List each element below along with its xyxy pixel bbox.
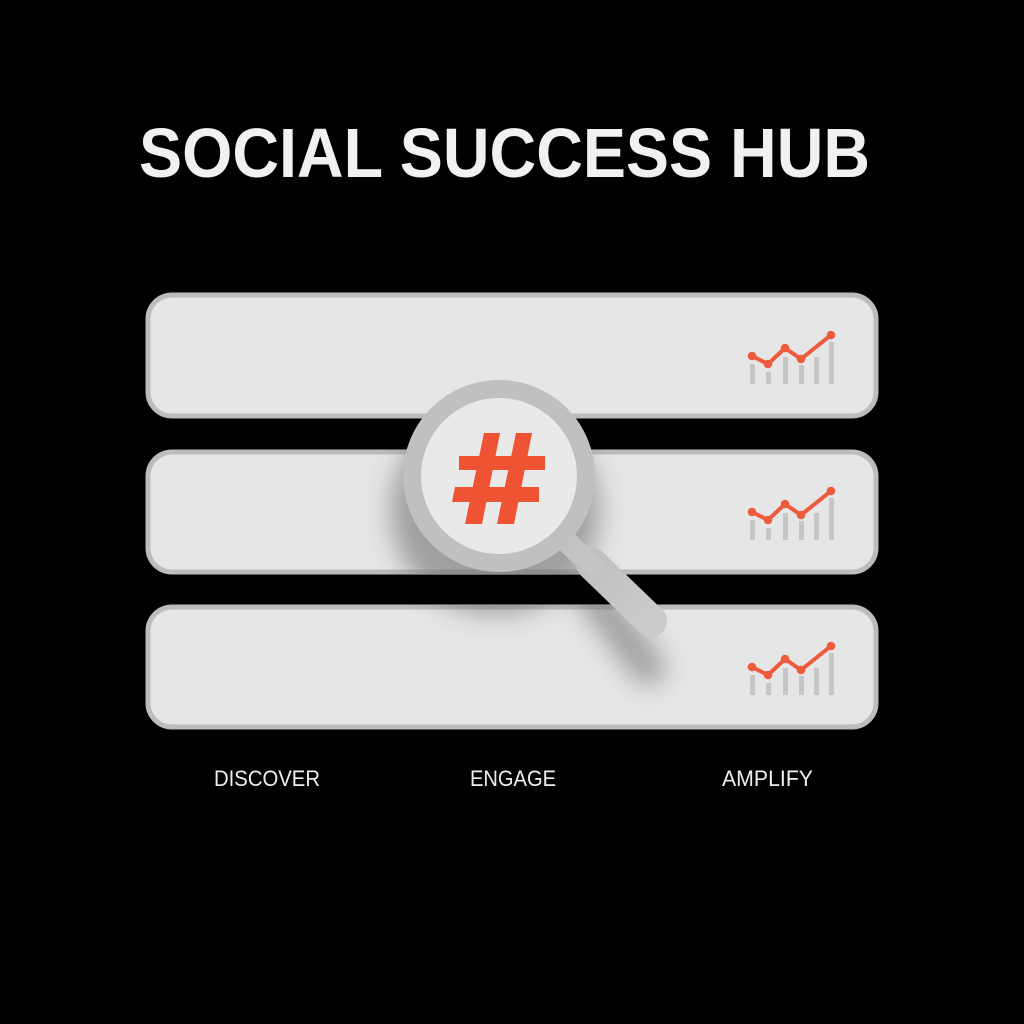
magnifier shadow — [391, 406, 648, 668]
label: amplify: AMPLIFY — [722, 766, 813, 791]
label: discover: DISCOVER — [214, 766, 320, 791]
icon: magnifying glass — [412, 389, 651, 621]
title: SOCIAL SUCCESS HUB — [139, 114, 870, 192]
magnifier handle — [565, 540, 651, 621]
icon: hashtag — [452, 433, 545, 524]
chart: row 3 trend — [748, 642, 835, 695]
label: engage: ENGAGE — [470, 766, 556, 791]
panel: row 2 — [148, 452, 876, 572]
chart: row 1 trend — [748, 331, 835, 384]
chart: row 2 trend — [748, 487, 835, 540]
panel: row 3 — [148, 607, 876, 727]
panel: row 1 — [148, 295, 876, 416]
magnifier lens — [412, 389, 586, 563]
